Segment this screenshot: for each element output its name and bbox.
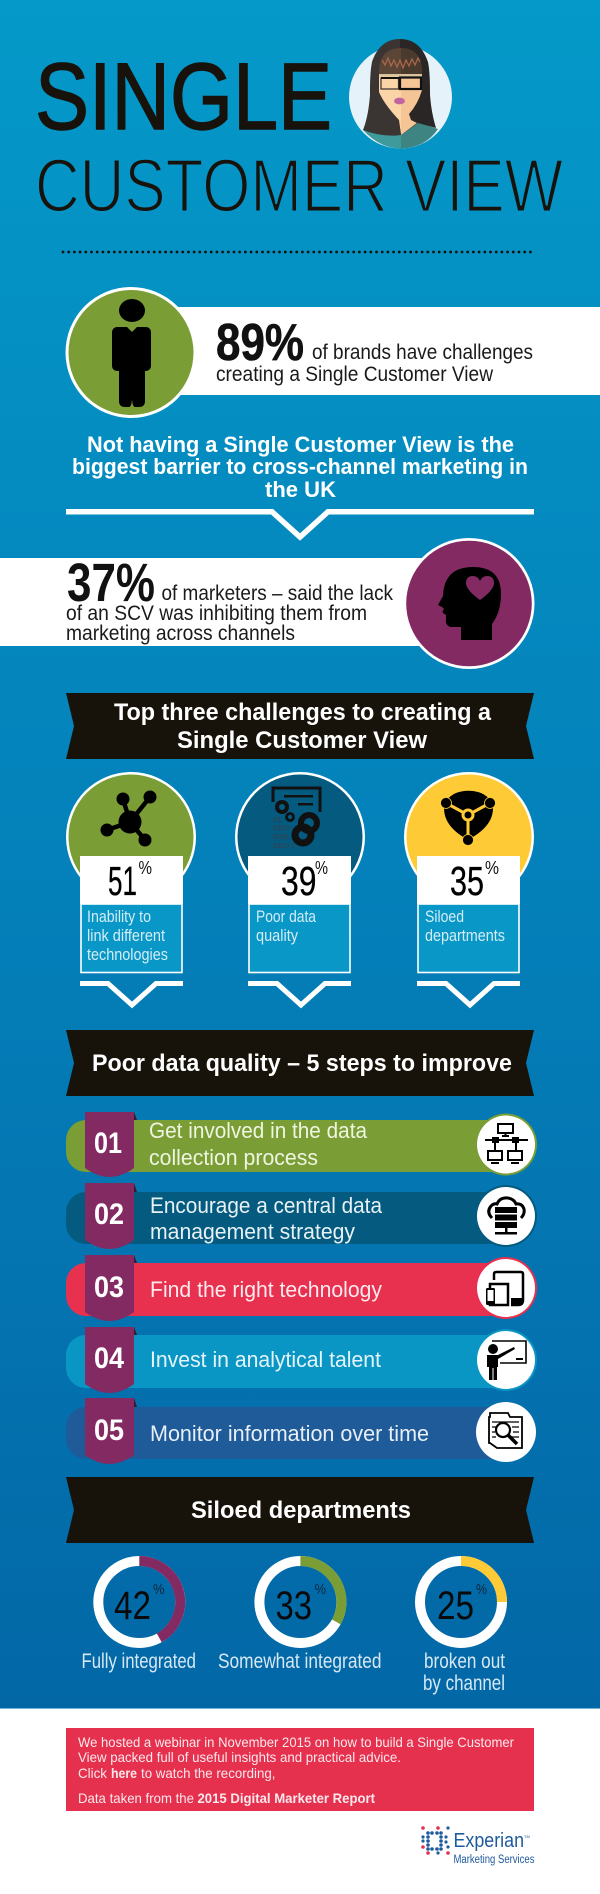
- donut: broken out by channel 25%: broken out: [424, 1650, 505, 1673]
- percentage: 51: [108, 858, 137, 904]
- stat text: of an SCV was inhibiting them from: [66, 602, 367, 625]
- label: link different: [87, 926, 165, 945]
- callout: webinar note: View packed full of useful insights and practical advice.: [78, 1749, 401, 1765]
- percentage: [80, 856, 183, 904]
- heading: biggest barrier: the UK: [265, 477, 336, 502]
- heading: biggest barrier: Not having a Single Customer View is the: [87, 432, 514, 457]
- step 05: [66, 1398, 536, 1464]
- stat text: creating a Single Customer View: [216, 363, 494, 386]
- banner: siloed departments: [66, 1477, 534, 1543]
- callout: webinar note: We hosted a webinar in November 2015 on how to build a Single Customer: [78, 1734, 514, 1750]
- icon: presenter at board: [487, 1341, 526, 1380]
- white band: [150, 307, 600, 395]
- icon: data gears: 01: [273, 815, 281, 824]
- label: Siloed: [425, 907, 464, 926]
- icon: woman avatar: [349, 39, 452, 148]
- donut: broken out by channel 25%: 25: [437, 1584, 474, 1628]
- banner: siloed departments: Siloed departments: [191, 1497, 411, 1524]
- percentage: 35: [450, 858, 484, 904]
- donut: somewhat integrated 33%: Somewhat integrated: [218, 1650, 382, 1673]
- step 03: 03: [94, 1271, 124, 1304]
- logo: Experian Marketing Services: [421, 1826, 535, 1866]
- logo: Experian Marketing Services: Marketing Services: [454, 1854, 535, 1866]
- step 01: Get involved in the data: [149, 1118, 368, 1143]
- banner: five steps: [66, 1030, 534, 1096]
- percentage: %: [315, 858, 328, 878]
- icon: head with heart in purple circle: [404, 538, 534, 669]
- banner: top three challenges: Top three challenges to creating a: [114, 699, 492, 726]
- callout: webinar note: here: [111, 1765, 137, 1781]
- percentage: %: [485, 858, 499, 878]
- logo: Experian Marketing Services: Experian: [454, 1830, 524, 1852]
- donut: broken out by channel 25%: by channel: [423, 1672, 505, 1695]
- icon: data gears: [273, 788, 320, 850]
- logo: Experian Marketing Services: TM: [524, 1834, 530, 1839]
- step 02: management strategy: [150, 1219, 355, 1244]
- percentage: 39: [281, 858, 316, 904]
- icon: person in green circle: [66, 287, 196, 418]
- donut: somewhat integrated 33%: 33: [276, 1584, 312, 1628]
- panel: challenge 35%: [404, 772, 534, 1005]
- step 02: [66, 1183, 537, 1249]
- donut: fully integrated 42%: [82, 1561, 196, 1673]
- callout: webinar note: to watch the recording,: [141, 1765, 276, 1781]
- donut: somewhat integrated 33%: [218, 1561, 382, 1673]
- heading: biggest barrier: [72, 432, 528, 502]
- icon: data gears: 0110 1: [273, 841, 295, 850]
- stat text: 37%: [67, 553, 155, 613]
- white band: [0, 558, 440, 646]
- icon: three-way shield: [440, 791, 496, 846]
- donut: fully integrated 42%: %: [153, 1581, 164, 1598]
- panel: challenge 51%: [66, 772, 196, 1005]
- stat text: of brands have challenges: [312, 341, 533, 364]
- label: departments: [425, 926, 505, 945]
- percentage: [248, 856, 351, 904]
- step 04: 04: [94, 1342, 124, 1375]
- icon: devices: [486, 1272, 523, 1305]
- label: Poor data: [256, 907, 316, 926]
- step 04: Invest in analytical talent: [150, 1347, 381, 1372]
- label: quality: [256, 926, 298, 945]
- percentage: [417, 856, 520, 904]
- step 03: Find the right technology: [150, 1277, 382, 1302]
- stat text: [66, 553, 393, 645]
- donut: fully integrated 42%: Fully integrated: [82, 1650, 196, 1673]
- stat text: [216, 314, 533, 386]
- banner: five steps: Poor data quality – 5 steps to improve: [92, 1050, 512, 1077]
- arrow: chevron divider: [66, 512, 534, 537]
- callout: webinar note: Click: [78, 1765, 108, 1781]
- arrow: [248, 984, 351, 1005]
- donut: broken out by channel 25%: [420, 1561, 505, 1695]
- stat text: 89%: [216, 314, 304, 372]
- title: SINGLE: [35, 44, 332, 150]
- percentage: %: [138, 858, 152, 878]
- step 01: [66, 1112, 537, 1177]
- icon: network: [485, 1124, 528, 1163]
- step 05: Monitor information over time: [150, 1421, 429, 1446]
- step 04: [66, 1327, 537, 1393]
- label: [418, 904, 519, 972]
- label: technologies: [87, 945, 168, 964]
- step 03: [66, 1255, 537, 1321]
- callout: webinar note: 2015 Digital Marketer Report: [198, 1790, 375, 1806]
- step 05: 05: [94, 1414, 124, 1447]
- label: [81, 904, 182, 972]
- icon: data gears: 0110: [273, 823, 289, 832]
- panel: 37% stat: [0, 538, 534, 669]
- step 01: 01: [94, 1127, 122, 1160]
- panel: challenge 39%: [235, 772, 365, 1005]
- icon: documents with magnifier: [489, 1413, 522, 1448]
- icon: data gears: 0001: [273, 832, 290, 841]
- arrow: [417, 984, 520, 1005]
- donut: somewhat integrated 33%: %: [314, 1581, 326, 1598]
- stat text: marketing across channels: [66, 622, 295, 645]
- title: [35, 44, 563, 228]
- icon: cloud server: [489, 1198, 524, 1234]
- heading: biggest barrier: biggest barrier to cross-channel marketing in: [72, 454, 528, 479]
- arrow: [80, 984, 183, 1005]
- donut: fully integrated 42%: 42: [114, 1584, 151, 1628]
- donut: broken out by channel 25%: %: [476, 1581, 487, 1598]
- icon: linked nodes: [100, 790, 156, 846]
- label: Inability to: [87, 907, 151, 926]
- banner: top three challenges: [66, 693, 534, 759]
- callout: webinar note: Data taken from the: [78, 1790, 194, 1806]
- callout: webinar note: [66, 1728, 534, 1811]
- banner: top three challenges: Single Customer View: [177, 727, 427, 754]
- dotted divider: [63, 251, 534, 253]
- stat text: of marketers – said the lack: [162, 582, 393, 605]
- step 02: 02: [94, 1198, 124, 1231]
- label: [249, 904, 350, 972]
- panel: 89% stat: [66, 287, 600, 418]
- step 01: collection process: [149, 1145, 318, 1170]
- step 02: Encourage a central data: [150, 1193, 383, 1218]
